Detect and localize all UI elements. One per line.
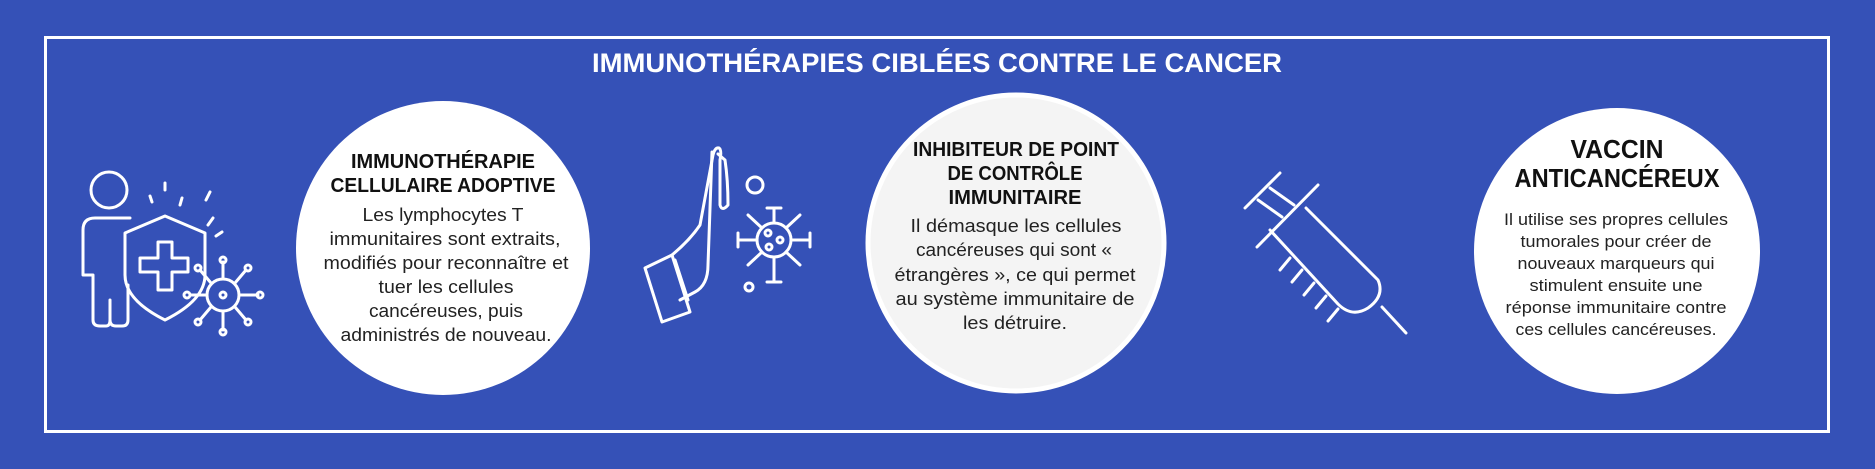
panel: cancer vaccine: réponse immunitaire contre	[1506, 298, 1726, 317]
panel: checkpoint inhibitor: étrangères », ce qui permet	[894, 265, 1136, 285]
panel: adoptive cell therapy: immunitaires sont extraits,	[330, 229, 560, 249]
panel: adoptive cell therapy: tuer les cellules	[378, 277, 514, 297]
panel: adoptive cell therapy: administrés de nouveau.	[340, 325, 552, 345]
panel: checkpoint inhibitor: INHIBITEUR DE POINT	[913, 139, 1119, 161]
panel: cancer vaccine: ces cellules cancéreuses.	[1516, 320, 1716, 339]
panel: checkpoint inhibitor: au système immunitaire de	[896, 289, 1134, 309]
panel: cancer vaccine: tumorales pour créer de	[1520, 232, 1712, 251]
panel: cancer vaccine	[1474, 108, 1760, 394]
panel: cancer vaccine: stimulent ensuite une	[1530, 276, 1702, 295]
title: IMMUNOTHÉRAPIES CIBLÉES CONTRE LE CANCER	[592, 47, 1282, 78]
icon: syringe	[1245, 173, 1406, 333]
panel: cancer vaccine: VACCIN	[1570, 134, 1664, 164]
panel: cancer vaccine: ANTICANCÉREUX	[1514, 163, 1720, 193]
panel: adoptive cell therapy: IMMUNOTHÉRAPIE	[351, 150, 535, 173]
panel: checkpoint inhibitor: les détruire.	[963, 313, 1067, 333]
panel: cancer vaccine: nouveaux marqueurs qui	[1518, 254, 1714, 273]
panel: cancer vaccine: Il utilise ses propres cellules	[1504, 210, 1728, 229]
panel: adoptive cell therapy: modifiés pour reconnaître et	[324, 253, 568, 273]
panel: checkpoint inhibitor: cancéreuses qui sont «	[916, 240, 1112, 260]
panel: adoptive cell therapy	[296, 101, 590, 395]
panel: adoptive cell therapy: CELLULAIRE ADOPTIVE	[330, 175, 556, 197]
panel: adoptive cell therapy: Les lymphocytes T	[362, 205, 524, 225]
panel: checkpoint inhibitor	[868, 95, 1164, 391]
icon: hand stopping virus	[645, 148, 810, 322]
panel: adoptive cell therapy: cancéreuses, puis	[369, 301, 523, 321]
panel: checkpoint inhibitor: Il démasque les cellules	[910, 216, 1122, 236]
panel: checkpoint inhibitor: DE CONTRÔLE	[948, 161, 1082, 185]
icon: person with shield and virus	[83, 172, 263, 335]
panel: checkpoint inhibitor: IMMUNITAIRE	[948, 187, 1082, 209]
